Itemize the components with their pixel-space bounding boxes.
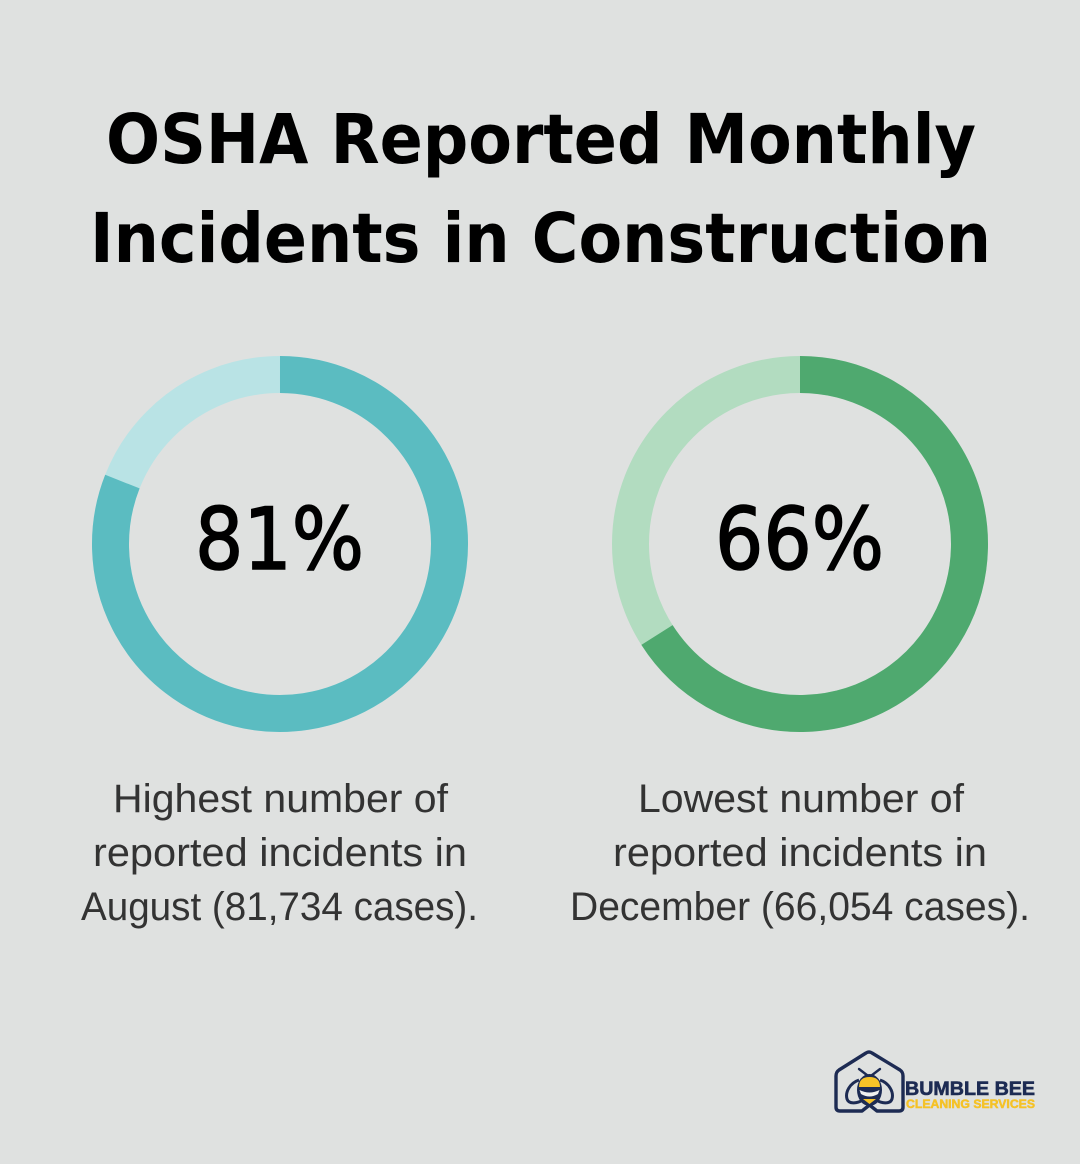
- wordmark: Bumble Bee: BUMBLE BEE: [905, 1078, 1035, 1100]
- caption: lowest: [570, 777, 1030, 929]
- caption: highest: reported incidents in: [93, 831, 467, 875]
- caption: lowest: December (66,054 cases).: [570, 885, 1030, 929]
- icon: house with bee: [836, 1052, 903, 1111]
- caption: lowest: reported incidents in: [613, 831, 987, 875]
- caption: highest: August (81,734 cases).: [81, 885, 478, 929]
- title: OSHA Reported Monthly: [106, 100, 976, 180]
- logo: Bumble Bee Cleaning Services: [836, 1052, 1035, 1111]
- caption: lowest: Lowest number of: [638, 777, 965, 821]
- panel: lowest month: [570, 374, 1030, 929]
- panel: highest month: [81, 374, 478, 929]
- donut chart: 81%: [110, 374, 449, 714]
- caption: highest: Highest number of: [113, 777, 449, 821]
- title: [90, 100, 991, 279]
- caption: highest: [81, 777, 478, 929]
- value: 81%: 81%: [195, 490, 364, 590]
- title: Incidents in Construction: [90, 199, 991, 279]
- value: 66%: 66%: [715, 490, 884, 590]
- donut chart: 66%: [630, 374, 970, 714]
- tagline: Cleaning Services: CLEANING SERVICES: [906, 1097, 1035, 1111]
